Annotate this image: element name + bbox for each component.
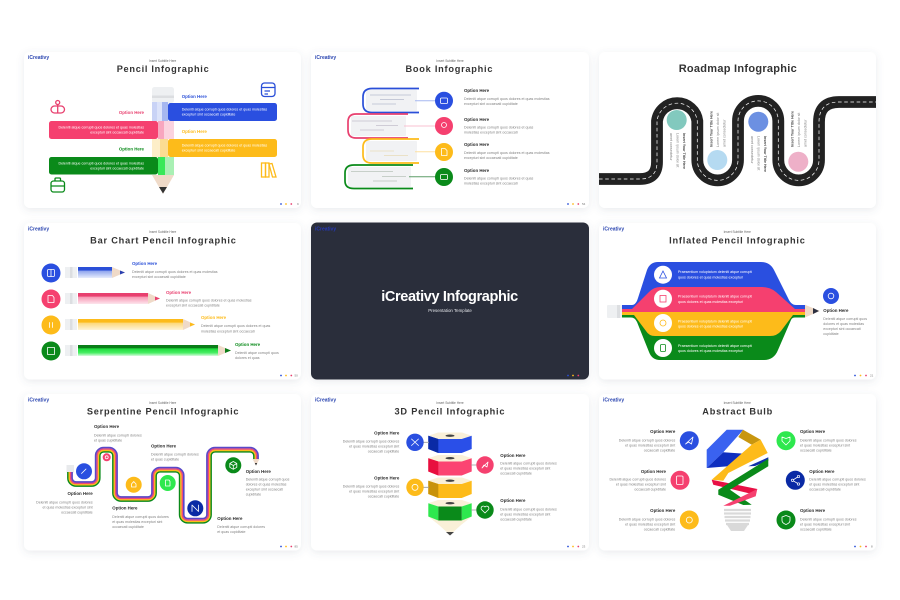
option texts: et quas cupiditate [151,458,179,462]
logo: iCreativy [315,397,336,403]
option texts: Option Here [464,168,490,173]
option texts: occaecati cupiditate [644,528,675,532]
icon circles [670,431,805,530]
milestone text 4: Insert Your Title Here [791,111,795,147]
card background [24,52,301,208]
subtitle: Insert Subtitle Here [149,230,177,234]
option texts: Option Here [650,429,676,434]
blue pencil bar: Deleniti atque corrupti quos dolores et quas molestias [132,270,218,274]
pencil eraser and tip [66,459,260,472]
card background [24,223,301,380]
option texts: occaecati cupiditate [61,510,93,514]
green pencil bar: Deleniti atque corrupti quos [235,351,279,355]
option texts: Deleniti atque corrupti dolores [94,434,142,438]
section texts: quos dolores et quas molestias excepturi [678,300,743,304]
inflated shape: pink [622,287,805,312]
pink pencil bar: Option Here [166,290,192,295]
white icon badges [654,266,672,357]
footer dots [280,544,298,548]
option 2 bar [49,110,158,139]
option texts: Deleniti atque corrupti quos [246,478,290,482]
blue pencil bar: Option Here [132,261,158,266]
option 2 bar: Option Here [119,110,145,115]
subtitle: Insert Subtitle Here [149,59,177,63]
3D segment: blue [428,432,472,453]
option texts: Option Here [464,117,490,122]
logo: iCreativy [603,397,624,403]
section texts: Praesentium voluptatum deleniti atque corrupti [678,295,752,299]
card background [599,394,876,550]
road [599,101,876,180]
3D segment: green with tip [428,500,472,536]
title: 3D Pencil Infographic [394,406,504,416]
inflated shape: green [622,315,805,360]
option texts: dolores et quas molestias [246,483,287,487]
milestone text 1: Insert Your Title Here [682,133,686,169]
option texts: et quas molestias excepturi sint [112,520,162,524]
icon: calendar [262,83,275,96]
subtitle: Insert Subtitle Here [436,59,464,63]
card background [599,223,876,380]
footer dots [567,544,586,548]
inflated shape: yellow [622,312,805,336]
logo: iCreativy [603,226,624,232]
green pencil bar [65,342,279,360]
option 1 bar: Deleniti atque corrupti quos dolores et quas molestias [182,107,267,111]
title: Abstract Bulb [702,406,773,416]
subtitle: Insert Subtitle Here [436,401,464,405]
panel: bar chart pencil infographic [24,223,301,380]
icon circles with connectors [406,434,494,519]
panel: dark cover slide [311,222,589,380]
card background [311,394,589,550]
milestone text 1 [669,133,686,169]
title: Roadmap Infographic [679,63,797,75]
panel: pencil infographic [24,52,301,208]
footer dots [280,373,298,377]
pink pencil bar: Deleniti atque corrupti quos dolores et quas molestias [166,299,252,303]
blue book [363,88,436,112]
option texts: Option Here [800,508,826,513]
option texts: Deleniti atque corrupti quos dolores [500,462,557,466]
footer dots: 9 [297,202,299,206]
milestone text 4 [791,111,808,147]
cover subtitle: Presentation Template [428,308,472,313]
pink pencil bar: excepturi sint occaecati cupiditate [166,304,220,308]
option texts: Option Here [374,475,400,480]
footer dots [567,202,586,206]
option texts: occaecati cupiditate [368,494,399,498]
option texts: Deleniti atque corrupti quos dolores et quas molestias [464,97,550,101]
option texts: et quas molestias excepturi sint [43,505,93,509]
option texts: Option Here [68,491,93,496]
section texts: Praesentium voluptatum deleniti atque corrupti [678,344,752,348]
section texts: quos dolores et quas molestias excepturi [678,349,743,353]
3D segment: pink [428,455,472,476]
footer dots [567,375,579,376]
option 3 bar: excepturi sint occaecati cupiditate [182,149,235,153]
3D segment: yellow [428,478,472,498]
option texts: Option Here [464,88,490,93]
card background [599,52,876,208]
icon: person [51,100,64,113]
milestone text 4: Lorem ipsum dolor sit [797,113,801,147]
icon circles [76,453,241,516]
option 3 bar: Deleniti atque corrupti quos dolores et quas molestias [182,143,267,147]
yellow pencil bar: Deleniti atque corrupti quos dolores et quas [201,324,271,328]
footer dots: 85 [294,544,298,548]
option texts: Option Here [641,469,667,474]
milestone text 3 [750,136,767,172]
option texts: Deleniti atque corrupti quos dolores [343,484,399,488]
panel: abstract bulb [599,394,876,550]
option texts: Deleniti atque corrupti dolores [151,453,199,457]
section texts: Praesentium voluptatum deleniti atque corrupti [678,319,752,323]
option texts: Option Here [500,453,526,458]
title: Pencil Infographic [117,64,209,74]
footer dots: 21 [870,373,874,377]
green book [345,165,436,188]
option texts: et quas cupiditate [94,439,122,443]
option 1 bar: Option Here [182,94,207,99]
option texts: et quas molestias excepturi sint [800,443,850,447]
logo: iCreativy [28,397,49,403]
callout: cupiditate [823,332,839,336]
callout: Deleniti atque corrupti quos [823,317,867,321]
option texts: Deleniti atque corrupti quos dolores [36,500,93,504]
option texts: et quas molestias excepturi sint [349,444,399,448]
central pencil [152,87,174,194]
yellow book [363,139,436,163]
icon circles [435,92,453,186]
serpentine ribbon [68,448,258,523]
footer dots: 54 [582,202,586,206]
inflated shape: blue [622,262,805,312]
title: Inflated Pencil Infographic [669,235,805,245]
callout [823,288,867,336]
option 2 bar: Deleniti atque corrupti quos dolores et quas molestias [58,126,144,130]
milestone text 1: Lorem ipsum dolor sit [676,133,680,167]
footer dots: 50 [294,373,298,377]
milestone text 2: amet consectetur [723,119,727,147]
yellow pencil bar: Option Here [201,315,227,320]
option texts: Deleniti atque corrupti quos dolores [500,507,557,511]
panel: roadmap infographic [599,52,876,208]
blue pencil bar: excepturi sint occaecati cupiditate [132,275,186,279]
option texts: Deleniti atque corrupti quos dolores [619,518,675,522]
panel: serpentine pencil infographic [24,394,301,550]
panel: book infographic [311,52,589,208]
option texts: occaecati cupiditate [500,472,532,476]
option texts: Option Here [500,498,526,503]
section texts: quos dolores et quas molestias excepturi [678,325,743,329]
milestone text 2: Insert Your Title Here [710,111,714,147]
option texts: Deleniti atque corrupti quos dolores [112,515,169,519]
option texts: cupiditate [246,493,261,497]
title: Serpentine Pencil Infographic [87,406,239,416]
option texts: excepturi sint occaecati cupiditate [464,156,518,160]
option 3 bar: Option Here [182,129,207,134]
footer dots [280,202,299,206]
icon: books [262,163,276,177]
option texts: Option Here [151,443,177,448]
option texts: Deleniti atque corrupti quos dolores [619,438,675,442]
option texts: occaecati cupiditate [644,448,675,452]
milestone text 1: amet consectetur [669,133,673,161]
option texts [609,429,866,532]
title: Book Infographic [406,64,492,74]
option texts: Deleniti atque corrupti quos dolores [609,478,666,482]
blue pencil bar [65,261,218,279]
green pencil bar: dolores et quas [235,356,260,360]
yellow pencil bar [65,315,271,334]
callout: dolores et quas molestias [823,322,864,326]
option texts: Option Here [112,505,138,510]
icon: briefcase [51,178,64,192]
option texts [464,88,550,186]
subtitle: Insert Subtitle Here [724,401,751,405]
option texts: Deleniti atque corrupti quos dolores et quas molestias [464,151,550,155]
milestone text 3: amet consectetur [750,136,754,164]
option texts: Deleniti atque corrupti quos dolores [343,439,399,443]
callout: excepturi sint occaecati [823,327,861,331]
option 4 bar: Option Here [119,146,145,151]
option texts: et quas cupiditate [217,530,245,534]
option texts: Deleniti atque corrupti quos dolores et quas [464,126,534,130]
option texts: Deleniti atque corrupti quos dolores [809,478,866,482]
card background [24,394,301,550]
icon circles [42,264,60,360]
panel: 3D pencil infographic [311,394,589,550]
option texts: et quas molestias excepturi sint [500,467,550,471]
pink pencil bar [65,290,252,308]
option texts: Option Here [217,516,243,521]
option texts: molestias excepturi sint occaecati [464,131,518,135]
section texts [678,270,752,353]
subtitle: Insert Subtitle Here [724,230,751,234]
option texts: et quas molestias excepturi sint [349,489,399,493]
milestone circles [667,110,808,172]
option texts: Option Here [94,424,120,429]
option texts: Option Here [246,469,271,474]
option 3 bar [168,129,277,157]
option texts: excepturi sint occaecati [246,488,283,492]
option 1 bar [168,94,277,121]
subtitle: Insert Subtitle Here [149,401,177,405]
option 4 bar: excepturi sint occaecati cupiditate [90,166,144,170]
option texts: excepturi sint occaecati cupiditate [464,102,518,106]
milestone text 2: Lorem ipsum dolor sit [716,113,720,147]
option texts: occaecati cupiditate [112,525,144,529]
option texts: et quas molestias excepturi sint [616,483,666,487]
milestone text 4: amet consectetur [804,119,808,147]
footer dots: 23 [582,544,586,548]
option texts: et quas molestias excepturi sint [625,443,675,447]
option texts: et quas molestias excepturi sint [809,483,859,487]
card background [311,222,589,380]
logo: iCreativy [28,226,49,232]
option texts: Deleniti atque corrupti quos dolores [800,518,857,522]
cover title: iCreativy Infographic [381,289,518,305]
option 2 bar: excepturi sint occaecati cupiditate [90,131,144,135]
option 1 bar: excepturi sint occaecati cupiditate [182,113,235,117]
option texts: Option Here [464,142,490,147]
option texts: occaecati cupiditate [809,488,841,492]
option texts: occaecati cupiditate [368,449,399,453]
option texts: Option Here [374,430,400,435]
title: Bar Chart Pencil Infographic [90,235,236,245]
yellow pencil bar: molestias excepturi sint occaecati [201,330,255,334]
option texts: occaecati cupiditate [634,488,666,492]
pencil eraser and tip [607,305,820,318]
bulb illustration [707,430,768,531]
green pencil bar: Option Here [235,342,261,347]
option texts: occaecati cupiditate [800,528,832,532]
milestone text 3: Lorem ipsum dolor sit [757,136,761,170]
section texts: Praesentium voluptatum deleniti atque corrupti [678,270,752,274]
section texts: quos dolores et quas molestias excepturi [678,275,743,279]
option texts: et quas molestias excepturi sint [500,512,550,516]
option 4 bar: Deleniti atque corrupti quos dolores et quas molestias [58,161,144,165]
option texts [36,424,290,534]
option 4 bar [49,146,158,174]
card background [311,52,589,208]
logo: iCreativy [315,55,336,61]
option texts: Option Here [800,429,826,434]
option texts: et quas molestias excepturi sint [625,523,675,527]
footer dots [854,373,874,377]
panel: inflated pencil infographic [599,223,876,380]
footer dots: 8 [871,544,873,548]
option texts: occaecati cupiditate [500,517,532,521]
option texts: Deleniti atque corrupti dolores [217,525,265,529]
option texts: occaecati cupiditate [800,448,832,452]
callout: Option Here [823,308,849,313]
milestone text 2 [710,111,727,147]
option texts: Deleniti atque corrupti quos dolores [800,438,857,442]
logo: iCreativy [28,55,49,61]
option texts [343,430,557,521]
option texts: Option Here [650,508,676,513]
footer dots [854,544,873,548]
pink book [348,114,436,138]
option texts: Deleniti atque corrupti quos dolores et quas [464,177,534,181]
milestone text 3: Insert Your Title Here [763,136,767,172]
option texts: molestias excepturi sint occaecati [464,182,518,186]
logo: iCreativy [315,226,336,232]
option texts: et quas molestias excepturi sint [800,523,850,527]
option texts: Option Here [809,469,835,474]
